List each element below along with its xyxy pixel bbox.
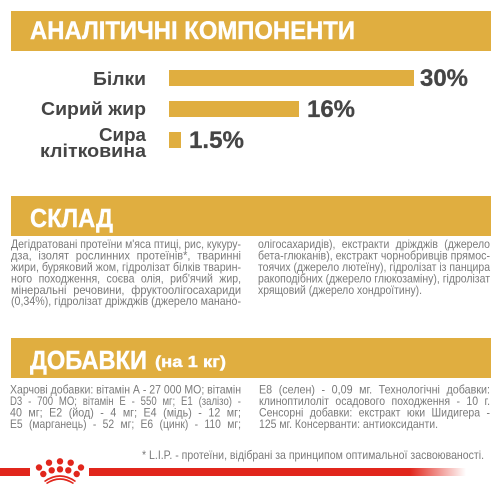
text block: additives right column <box>259 382 490 431</box>
text block: additives right column: 125 мг. Консерванти: антиоксиданти. <box>259 417 438 431</box>
text block: composition left column: мінеральні речовини, фруктоолігосахариди <box>11 283 241 297</box>
bar row: crude fat <box>41 96 355 123</box>
bar row: crude fat: Сирий жир <box>41 98 146 119</box>
bar row: protein: Білки <box>93 68 146 89</box>
text block: composition left column: жири, буряковий жом, гідролізат білків тварин- <box>11 260 241 274</box>
text block: additives left column: Е5 (марганець) - 52 мг; Е6 (цинк) - 110 мг; <box>10 417 241 431</box>
text block: additives left column <box>10 382 241 431</box>
icon: royal crown logo <box>36 458 84 484</box>
heading band: analytical components <box>11 11 491 51</box>
text block: composition left column <box>11 237 241 308</box>
text block: composition left column: (0,34%), гідролізат дріжджів (джерело манано- <box>11 294 241 308</box>
bar row: crude fat: 16% <box>307 96 355 123</box>
brand stripe left <box>0 468 30 476</box>
bar row: crude fibre: 1.5% <box>189 127 244 154</box>
text block: additives left column: 40 мг; Е2 (йод) - 4 мг; Е4 (мідь) - 12 мг; <box>10 406 241 420</box>
heading band: composition <box>11 196 491 236</box>
bar row: protein <box>93 65 468 92</box>
panel: composition <box>11 196 491 308</box>
heading band: analytical components: АНАЛІТИЧНІ КОМПОНЕНТИ <box>30 17 355 45</box>
bar row: crude fibre: Сира <box>99 124 147 145</box>
text block: additives left column: Харчові добавки: вітамін А - 27 000 МО; вітамін <box>10 382 241 396</box>
text block: composition right column: хрящовий (джерело хондроїтину). <box>258 283 422 297</box>
text block: composition left column: дза, ізолят рослинних протеїнів*, тваринні <box>11 248 241 262</box>
bar chart <box>40 65 468 161</box>
heading band: additives per kg: ДОБАВКИ <box>30 345 147 375</box>
bar row: crude fibre: клітковина <box>40 140 147 161</box>
panel: analytical components <box>11 11 491 161</box>
heading band: additives per kg: (на 1 кг) <box>155 354 226 371</box>
bar row: protein: 30% <box>420 65 468 92</box>
text block: composition right column <box>258 237 490 297</box>
bar row: crude fibre <box>40 124 244 161</box>
brand stripe right with fade <box>89 468 466 476</box>
text block: additives left column: D3 - 700 МО; вітамін Е - 550 мг; Е1 (залізо) - <box>10 394 241 408</box>
heading band: composition: СКЛАД <box>30 203 113 233</box>
heading band: additives per kg <box>11 338 491 378</box>
text block: composition left column: Дегідратовані протеїни м'яса птиці, рис, кукуру- <box>11 237 241 251</box>
panel: additives <box>10 338 491 431</box>
text block: composition left column: ного походження, соєва олія, риб'ячий жир, <box>11 272 241 286</box>
